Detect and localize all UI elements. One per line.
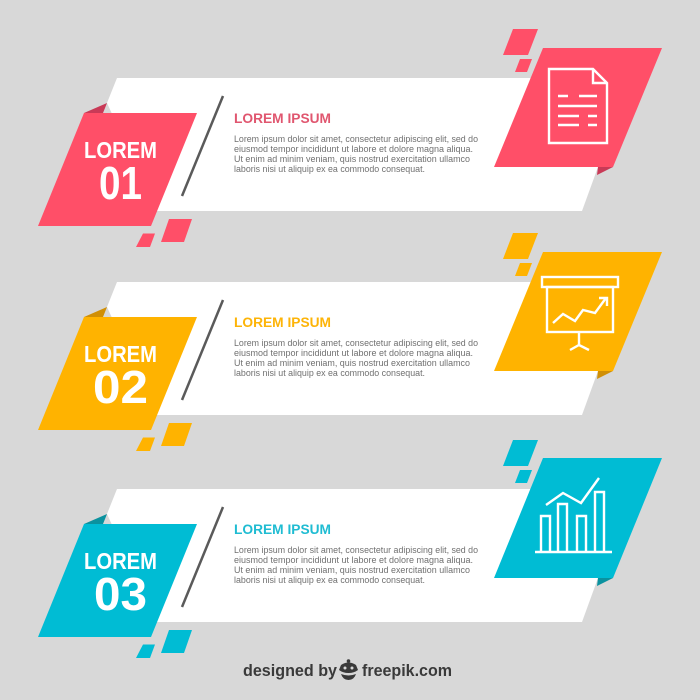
slanted divider 03 bbox=[182, 507, 223, 607]
heading 01: LOREM IPSUM bbox=[234, 111, 331, 126]
body text 01: laboris nisi ut aliquip ex ea commodo consequat. bbox=[234, 164, 425, 174]
right ribbon fold 02 bbox=[597, 371, 613, 379]
body text 02 bbox=[234, 338, 478, 378]
body text 03: eiusmod tempor incididunt ut labore et dolore magna aliqua. bbox=[234, 555, 473, 565]
heading 02: LOREM IPSUM bbox=[234, 315, 331, 330]
tag number 03: 03 bbox=[94, 568, 147, 620]
slanted divider 01 bbox=[182, 96, 223, 196]
body text 03: laboris nisi ut aliquip ex ea commodo consequat. bbox=[234, 575, 425, 585]
right tag 01 bbox=[494, 48, 662, 167]
body text 01: eiusmod tempor incididunt ut labore et dolore magna aliqua. bbox=[234, 144, 473, 154]
footer text: designed by: designed by bbox=[243, 661, 338, 680]
icon: presentation board bbox=[542, 277, 618, 350]
left ribbon fold 02 bbox=[84, 307, 107, 317]
white banner body 03 bbox=[107, 489, 598, 622]
right ribbon fold 03 bbox=[597, 578, 613, 586]
tag number 02: 02 bbox=[93, 361, 148, 413]
slanted divider 02 bbox=[182, 300, 223, 400]
decorative squares below tag 02 bbox=[136, 423, 192, 451]
icon: bar chart with trend line bbox=[535, 478, 612, 552]
tag label 01: LOREM bbox=[84, 137, 157, 163]
tag label 03: LOREM bbox=[84, 548, 157, 574]
right tag 03 bbox=[494, 458, 662, 578]
footer text: freepik.com: freepik.com bbox=[362, 661, 452, 680]
icon: freepik mascot bbox=[339, 659, 358, 680]
panel: banner 01 bbox=[38, 29, 662, 247]
decorative squares above tag 03 bbox=[503, 440, 538, 483]
tag label 02: LOREM bbox=[84, 341, 157, 367]
icon: document bbox=[549, 69, 607, 143]
body text 02: Ut enim ad minim veniam, quis nostrud exercitation ullamco bbox=[234, 358, 470, 368]
body text 03 bbox=[234, 545, 478, 585]
body text 02: laboris nisi ut aliquip ex ea commodo consequat. bbox=[234, 368, 425, 378]
panel: banner 02 bbox=[38, 233, 662, 451]
body text 01: Lorem ipsum dolor sit amet, consectetur adipiscing elit, sed do bbox=[234, 134, 478, 144]
decorative squares above tag 02 bbox=[503, 233, 538, 276]
body text 03: Lorem ipsum dolor sit amet, consectetur adipiscing elit, sed do bbox=[234, 545, 478, 555]
body text 03: Ut enim ad minim veniam, quis nostrud exercitation ullamco bbox=[234, 565, 470, 575]
left tag 03 bbox=[38, 524, 197, 637]
tag number 01: 01 bbox=[99, 157, 142, 209]
body text 02: Lorem ipsum dolor sit amet, consectetur adipiscing elit, sed do bbox=[234, 338, 478, 348]
white banner body 02 bbox=[107, 282, 598, 415]
body text 01: Ut enim ad minim veniam, quis nostrud exercitation ullamco bbox=[234, 154, 470, 164]
body text 01 bbox=[234, 134, 478, 174]
right tag 02 bbox=[494, 252, 662, 371]
body text 02: eiusmod tempor incididunt ut labore et dolore magna aliqua. bbox=[234, 348, 473, 358]
decorative squares above tag 01 bbox=[503, 29, 538, 72]
panel: banner 03 bbox=[38, 440, 662, 658]
decorative squares below tag 01 bbox=[136, 219, 192, 247]
left ribbon fold 03 bbox=[84, 514, 107, 524]
left tag 02 bbox=[38, 317, 197, 430]
heading 03: LOREM IPSUM bbox=[234, 522, 331, 537]
right ribbon fold 01 bbox=[597, 167, 613, 175]
footer credit bbox=[243, 659, 452, 680]
decorative squares below tag 03 bbox=[136, 630, 192, 658]
white banner body 01 bbox=[107, 78, 598, 211]
left ribbon fold 01 bbox=[84, 103, 107, 113]
left tag 01 bbox=[38, 113, 197, 226]
